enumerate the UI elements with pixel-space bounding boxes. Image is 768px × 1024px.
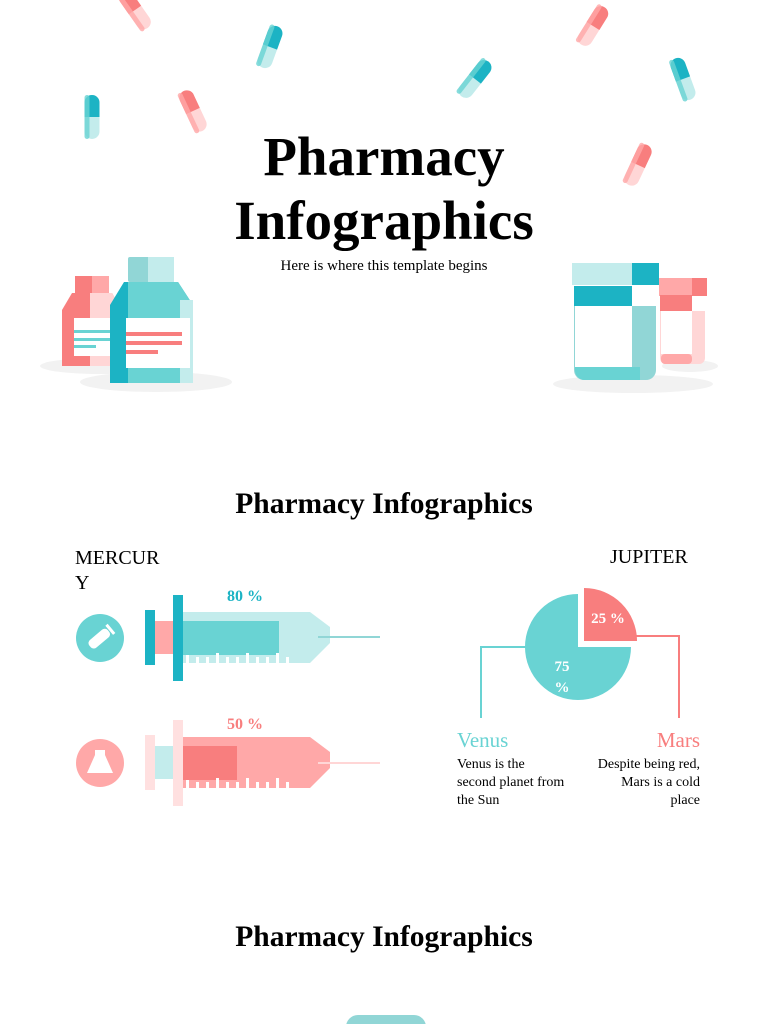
text: Mars: place	[670, 793, 700, 808]
title: Pharmacy	[263, 126, 505, 187]
text: Venus	[457, 728, 564, 808]
pills	[84, 0, 698, 188]
text: Mars: Despite being red,	[598, 757, 700, 772]
title: Infographics	[234, 190, 534, 251]
icon: jars right	[553, 263, 718, 393]
label: JUPITER: JUPITER	[610, 546, 688, 568]
label: MERCURY: MERCUR	[75, 547, 159, 569]
shape: cut-off teal bar	[346, 1015, 426, 1024]
chart: pie	[480, 588, 680, 718]
icon: bottles left	[40, 257, 232, 392]
heading: section 2: Pharmacy Infographics	[235, 921, 533, 953]
text: Venus: the Sun	[457, 793, 499, 808]
title	[234, 126, 534, 251]
text: Mars	[598, 728, 700, 808]
heading: section 1: Pharmacy Infographics	[235, 488, 533, 520]
label: MERCURY	[75, 547, 160, 594]
label: MERCURY: Y	[75, 572, 89, 594]
chart: pie: 25 %	[591, 611, 625, 627]
text: Mars: Mars is a cold	[621, 775, 700, 790]
syringe 50%	[76, 716, 380, 806]
syringe 80%: 80 %	[227, 588, 263, 605]
text: Venus: Venus	[457, 728, 508, 752]
syringe 80%	[76, 588, 380, 681]
subtitle: Here is where this template begins	[280, 258, 488, 274]
chart: pie: 75	[554, 659, 570, 675]
text: Mars: Mars	[657, 728, 700, 752]
chart: syringes	[76, 588, 380, 806]
text: Venus: Venus is the	[457, 757, 525, 772]
syringe 50%: 50 %	[227, 716, 263, 733]
text: Venus: second planet from	[457, 775, 564, 790]
chart: pie: %	[554, 680, 570, 696]
